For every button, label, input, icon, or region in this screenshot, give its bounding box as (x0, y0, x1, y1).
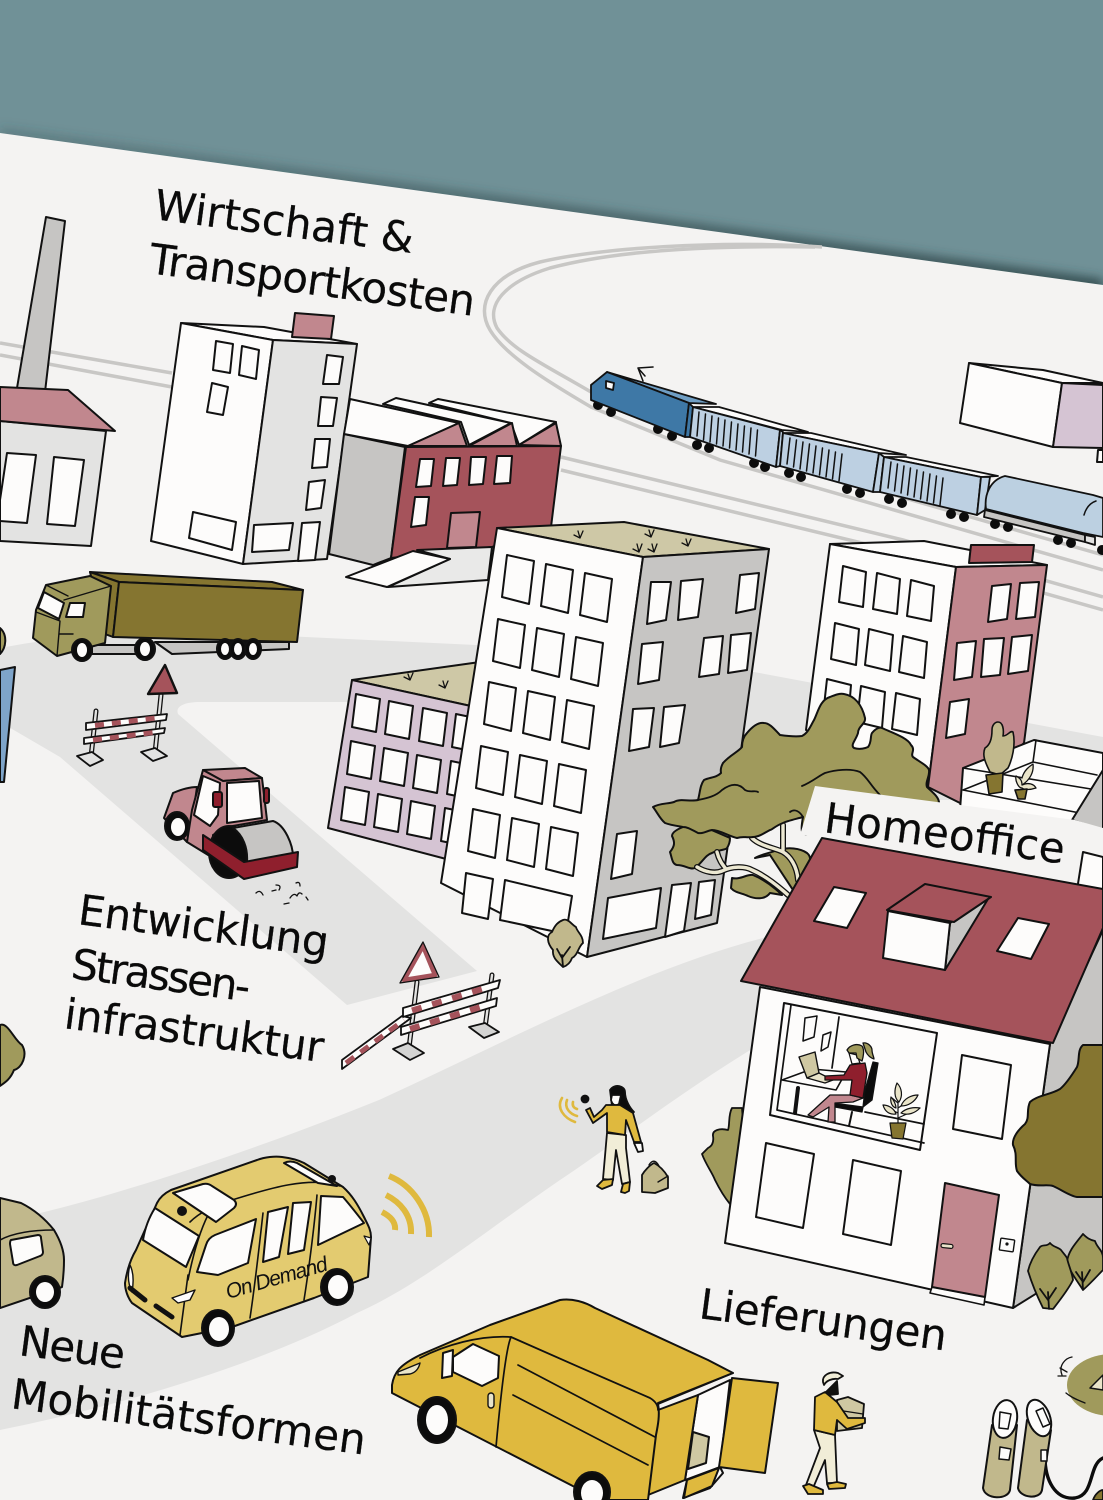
bus body seams (180, 1182, 340, 1335)
door (930, 1287, 985, 1305)
label background: Homeoffice patch (800, 786, 1103, 890)
chassis (92, 645, 138, 654)
charging cable (1045, 1457, 1103, 1498)
tree: dark olive right of house (1013, 1045, 1103, 1197)
wheels (418, 1397, 456, 1443)
train: freight train on curved track (591, 367, 1103, 555)
building: lilac residential block (328, 662, 480, 860)
skylight left (814, 887, 866, 928)
side windows (603, 573, 759, 939)
gravel (256, 882, 308, 904)
station 2 (1018, 1420, 1051, 1497)
road: lower curved road (0, 935, 775, 1430)
roof box (292, 313, 334, 339)
roof sunroof (173, 1184, 236, 1222)
label: Entwicklung Strassen-infrastruktur (62, 885, 332, 1072)
open door (719, 1378, 778, 1473)
rear wheel (165, 812, 189, 840)
label: Wirtschaft & Transportkosten: Transportkosten (146, 234, 478, 326)
railway tracks (0, 244, 1103, 610)
desk (782, 1069, 846, 1090)
label: Wirtschaft & Transportkosten (146, 180, 478, 326)
station 1 (983, 1425, 1017, 1497)
cab (203, 768, 262, 781)
container wagon 3 (884, 457, 998, 477)
roof (741, 838, 1103, 1043)
charging stations (983, 1396, 1103, 1498)
container wagon 1 (693, 407, 808, 432)
building: far right block (960, 363, 1103, 462)
parcel in van (688, 1432, 709, 1469)
main canopy (653, 694, 939, 838)
rear roof strip (284, 1162, 337, 1186)
triangular sign (404, 946, 435, 980)
bus lettering: On Demand (223, 1252, 332, 1304)
label: Neue Mobilitätsformen: Mobilitätsformen (9, 1369, 369, 1465)
locomotive (607, 372, 716, 404)
trailer (90, 572, 303, 590)
person: courier carrying parcels (803, 1372, 865, 1494)
side wall of the house (1013, 930, 1103, 1308)
wheels (72, 638, 261, 661)
label: Homeoffice: Homeoffice (822, 793, 1068, 874)
roof edge (420, 1337, 733, 1410)
intercom (999, 1238, 1015, 1252)
tank wagon (984, 510, 1085, 542)
chimney (17, 217, 65, 392)
tree: olive canopy and branches (653, 694, 939, 898)
small olive corner bush (1093, 1490, 1103, 1500)
roof box (969, 545, 1034, 563)
building: red brick factory (329, 398, 561, 587)
rear opening (685, 1380, 730, 1480)
label: Lieferungen: Lieferungen (697, 1279, 950, 1360)
building: left factory with chimney (0, 217, 115, 546)
road works: lower barrier with warning sign (342, 942, 500, 1069)
lower windows (953, 1055, 1011, 1139)
side windows (197, 1219, 256, 1275)
icon: bus wifi signal (382, 1176, 429, 1237)
building: tower with pink side (806, 541, 1047, 803)
plant: tan potted bush (984, 722, 1014, 775)
wheels (593, 400, 1103, 555)
shrub at tower base (548, 920, 583, 967)
person working at desk (808, 1043, 878, 1126)
label: Entwicklung Strassen-infrastruktur: infrastruktur (62, 989, 328, 1072)
windshield (143, 1208, 199, 1267)
wheels (202, 1310, 234, 1346)
label: Neue Mobilitätsformen (9, 1316, 369, 1465)
neighbouring wall window (1077, 852, 1103, 895)
bag (642, 1163, 668, 1193)
container wagon 2 (783, 433, 906, 455)
factory roof (0, 387, 115, 431)
pantograph (638, 367, 653, 381)
cab (33, 576, 111, 656)
drum frame (203, 835, 298, 879)
icon: phone wifi signal (560, 1098, 577, 1122)
person: woman with phone and bag (560, 1086, 668, 1193)
label: Entwicklung Strassen-infrastruktur: Strassen- (69, 939, 254, 1011)
label: Wirtschaft & Transportkosten: Wirtschaft & (152, 180, 417, 263)
road: upper road with construction branch (0, 632, 1103, 1005)
building: large white tower with green roof (441, 522, 769, 957)
on-demand minibus (125, 1157, 371, 1346)
drum (209, 826, 249, 878)
left edge: tree and blue building fragments (0, 628, 24, 1086)
branches (697, 825, 798, 895)
road roller (164, 768, 308, 904)
road works: upper barrier with warning sign (77, 665, 177, 766)
roof grass tufts (574, 530, 691, 552)
big window with home office scene (770, 1003, 937, 1150)
parking circle with triangle mark (1058, 1354, 1103, 1416)
van body (392, 1299, 733, 1500)
bumper (683, 1467, 723, 1498)
loading ramp (388, 547, 492, 587)
door seam and side lines (496, 1337, 655, 1465)
potted plant (883, 1083, 920, 1139)
dormer (883, 884, 991, 970)
plant: small potted sprout (1016, 764, 1036, 790)
van windows (453, 1344, 499, 1386)
label: Neue Mobilitätsformen: Neue (17, 1316, 128, 1379)
building: white office tower (151, 313, 357, 564)
bush: left of house (702, 1108, 750, 1210)
truck: olive semi-trailer (33, 572, 303, 661)
paper shadow (0, 127, 1103, 292)
delivery van with open rear doors (392, 1299, 778, 1500)
tan car at left edge (0, 1198, 64, 1308)
lower foliage (755, 848, 810, 890)
factory wall (0, 421, 106, 546)
wall (725, 987, 1050, 1308)
front windows (462, 555, 612, 934)
rear side panel (648, 1395, 698, 1495)
headlights (172, 1290, 195, 1303)
background: teal surface (0, 0, 1103, 300)
bushes: right of house (1028, 1234, 1103, 1309)
skylight right (997, 918, 1049, 959)
factory door (447, 512, 480, 548)
terrace with potted plants (960, 722, 1103, 840)
bus body (125, 1157, 371, 1337)
hood (164, 787, 197, 842)
house: home office building (725, 838, 1103, 1308)
laptop (799, 1052, 819, 1078)
label: Entwicklung Strassen-infrastruktur: Entwicklung (76, 885, 332, 967)
